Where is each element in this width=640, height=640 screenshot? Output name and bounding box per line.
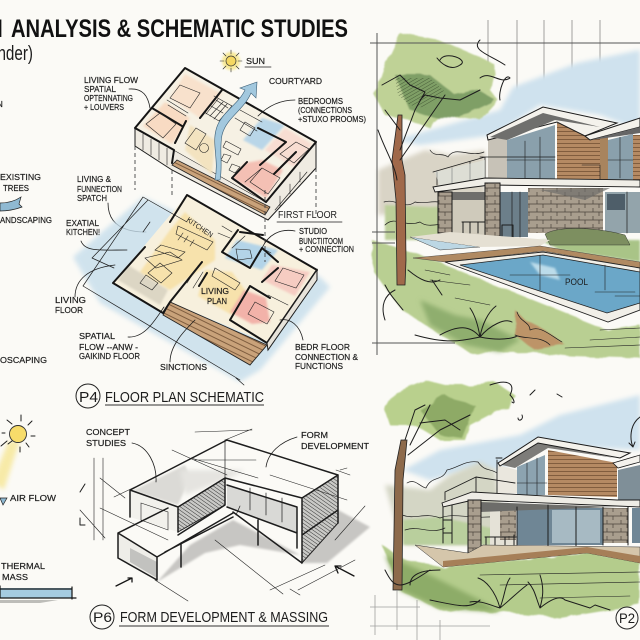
outline strokes: [118, 440, 338, 580]
arrow: callout from right: [629, 417, 640, 447]
dining set: [485, 535, 516, 548]
bedroom furniture: [248, 268, 304, 324]
label: landscaping: ANDSCAPING: [0, 216, 52, 225]
white wall: [498, 465, 517, 493]
timber deck edge: [443, 547, 640, 567]
living and function label: FUNNECTION: [77, 185, 122, 194]
leaders: [132, 437, 297, 482]
background trees: [385, 462, 500, 545]
tree trunk: [393, 440, 407, 590]
terrace wireframe: [83, 197, 244, 385]
dashed vertical projection lines: [135, 146, 316, 215]
construction lines: [80, 429, 365, 601]
living flow label: SPATIAL: [84, 85, 117, 94]
lawn: [382, 545, 640, 618]
living plan label: LIVING: [201, 287, 229, 296]
grid lines: [370, 590, 490, 640]
brown shrub: [515, 310, 565, 350]
leaders: [75, 230, 303, 362]
bedroom floor label: FUNCTIONS: [295, 362, 343, 371]
bedrooms furniture: [146, 85, 309, 194]
foreground plants: [385, 570, 610, 610]
floor plan labels: first floor: [77, 57, 366, 232]
heading: P4 floor plan schematic: P4: [79, 389, 98, 406]
arrows: [116, 566, 354, 586]
render: deck house perspective: [370, 380, 640, 640]
floor plan: first floor: [135, 68, 316, 220]
courtyard label: COURTYARD: [269, 77, 322, 86]
studio label: + CONNECTION: [299, 245, 354, 254]
wood cladding: [548, 450, 617, 497]
form development label: DEVELOPMENT: [301, 442, 369, 451]
sky wash: [403, 395, 640, 480]
bedrooms label: +STUXO PROOMS): [298, 115, 366, 124]
deck: [172, 160, 270, 215]
mullions: [517, 505, 628, 547]
terrace: [410, 232, 550, 247]
outer walls extrusion: [135, 128, 316, 220]
sun label: SUN: [246, 57, 265, 66]
foreground plants: [383, 270, 520, 341]
exatial kitchen label: KITCHEN!: [66, 228, 100, 237]
icon: sun wash: [0, 440, 20, 490]
grid lines: [488, 20, 600, 100]
label: existing trees: TREES: [3, 184, 29, 193]
living flow label: OPTENNATING: [84, 94, 133, 103]
P2 badge: P2: [619, 610, 635, 626]
living flow label: + LOUVERS: [84, 103, 124, 112]
background trees: [378, 150, 485, 215]
sections label: SINCTIONS: [160, 363, 207, 372]
wood cladding: [557, 123, 600, 180]
icon: thermal mass water: [0, 586, 76, 603]
ground floor glazing: [517, 508, 603, 545]
small pool: [410, 237, 480, 250]
bedrooms label: BEDROOMS: [298, 97, 343, 106]
tree foliage: [375, 33, 498, 128]
bath details: [218, 226, 271, 260]
hatched panels: [178, 478, 225, 532]
shrubs by wall: [545, 228, 630, 245]
room washes: [143, 74, 312, 198]
label: existing trees: EXISTING: [0, 173, 41, 182]
ground floor: [452, 192, 486, 235]
pool water: [460, 255, 640, 313]
balcony rail: [445, 458, 515, 500]
roof: [498, 437, 630, 466]
floor plan labels: ground floor: [55, 219, 359, 372]
massing sketch: [80, 428, 370, 601]
floor base: [113, 195, 317, 343]
stairs: [204, 96, 232, 121]
window band: [227, 485, 297, 533]
form development label: FORM: [301, 431, 328, 440]
tree trunk: [392, 115, 406, 285]
tree scribbles: [378, 40, 510, 180]
shrub scribbles: [515, 312, 562, 345]
heading: P6 form development: P6: [93, 609, 112, 625]
floor base: [135, 68, 316, 202]
deck: [163, 302, 267, 365]
heading: P6 form development: [90, 605, 329, 629]
glazing upper: [517, 455, 545, 495]
stone column: [468, 500, 481, 553]
ground shadows: [157, 510, 370, 582]
pool: [445, 252, 640, 322]
left face: [130, 490, 178, 532]
living furniture: [140, 226, 240, 290]
exatial kitchen label: EXATIAL: [66, 219, 100, 228]
floor plan: ground floor: [73, 190, 330, 385]
room washes: [118, 212, 310, 324]
label: thermal mass: MASS: [2, 573, 28, 582]
icon: blue wind ribbon: [0, 197, 22, 211]
section marks: [80, 484, 85, 525]
living and function label: LIVING &: [77, 175, 112, 184]
sky wash: [395, 50, 640, 145]
heading: P4 floor plan schematic: FLOOR PLAN SCHEMATIC: [105, 389, 264, 406]
spatial flow label: SPATIAL: [79, 332, 116, 341]
studio label: BUNCTIITOOM: [299, 237, 343, 246]
blue site wash: [73, 197, 330, 382]
heading: P6 form development: FORM DEVELOPMENT & MASSING: [120, 609, 328, 626]
terrace: [415, 545, 640, 567]
right volume: [618, 465, 640, 500]
spatial flow label: GAIKIND FLOOR: [79, 352, 140, 361]
icon: sun top: [220, 50, 242, 72]
dashed projections: [264, 190, 266, 262]
icon: sun: [1, 415, 35, 452]
living floor label: FLOOR: [55, 306, 83, 315]
flow arrow: [215, 82, 257, 180]
concept studies label: STUDIES: [86, 439, 126, 448]
living floor label: LIVING: [55, 296, 86, 305]
first floor label: FIRST FLOOR: [278, 210, 337, 221]
leaders: [108, 67, 342, 232]
tree scribbles: [405, 382, 562, 455]
panel: left site analysis (clipped): [0, 100, 76, 603]
bush outlines: [402, 462, 500, 531]
heading: P4 floor plan schematic: [76, 384, 264, 408]
slab: [433, 178, 640, 192]
studio label: STUDIO: [299, 227, 327, 236]
bedroom floor label: BEDR FLOOR: [295, 343, 350, 352]
timber deck: [413, 246, 640, 268]
icon: airflow arrow: [0, 498, 7, 505]
lawn: [372, 240, 640, 358]
roof shadow: [132, 465, 190, 505]
roof underside: [498, 442, 615, 468]
walls: [113, 195, 317, 343]
bedroom floor label: CONNECTION &: [295, 353, 359, 362]
living and function label: SPATCH: [77, 194, 107, 203]
bedrooms label: (CONNECTIONS: [298, 106, 352, 115]
outdoor furniture: [462, 222, 513, 240]
foliage hatching: [395, 78, 445, 108]
label: landscaping lower: OSCAPING: [0, 356, 47, 365]
concept studies label: CONCEPT: [86, 428, 130, 437]
bush outlines: [384, 150, 485, 225]
balcony rail: [433, 157, 555, 185]
label: air flow: AIR FLOW: [10, 494, 57, 503]
wall segment: [488, 136, 507, 180]
pool label: POOL: [565, 277, 588, 287]
label: thermal mass: THERMAL: [1, 562, 46, 571]
living plan label: PLAN: [207, 297, 227, 306]
slab: [442, 492, 640, 507]
spatial flow label: FLOW --ANW -: [79, 343, 138, 352]
render: pool house perspective: [370, 20, 640, 358]
lower volume wall: [118, 533, 157, 580]
pool coping: [445, 252, 640, 322]
living flow label: LIVING FLOW: [84, 76, 138, 85]
frame lines: [370, 33, 640, 355]
walls: [135, 68, 316, 202]
kitchen details: [221, 110, 262, 173]
tree foliage: [385, 380, 515, 440]
stone columns: [485, 183, 500, 243]
upper glazing: [507, 125, 555, 180]
kitchen label: KITCHEN: [185, 215, 215, 239]
roofs: [487, 107, 617, 140]
title: ANALYSIS & SCHEMATIC STUDIES: [11, 15, 348, 43]
P2 badge: [616, 607, 638, 629]
